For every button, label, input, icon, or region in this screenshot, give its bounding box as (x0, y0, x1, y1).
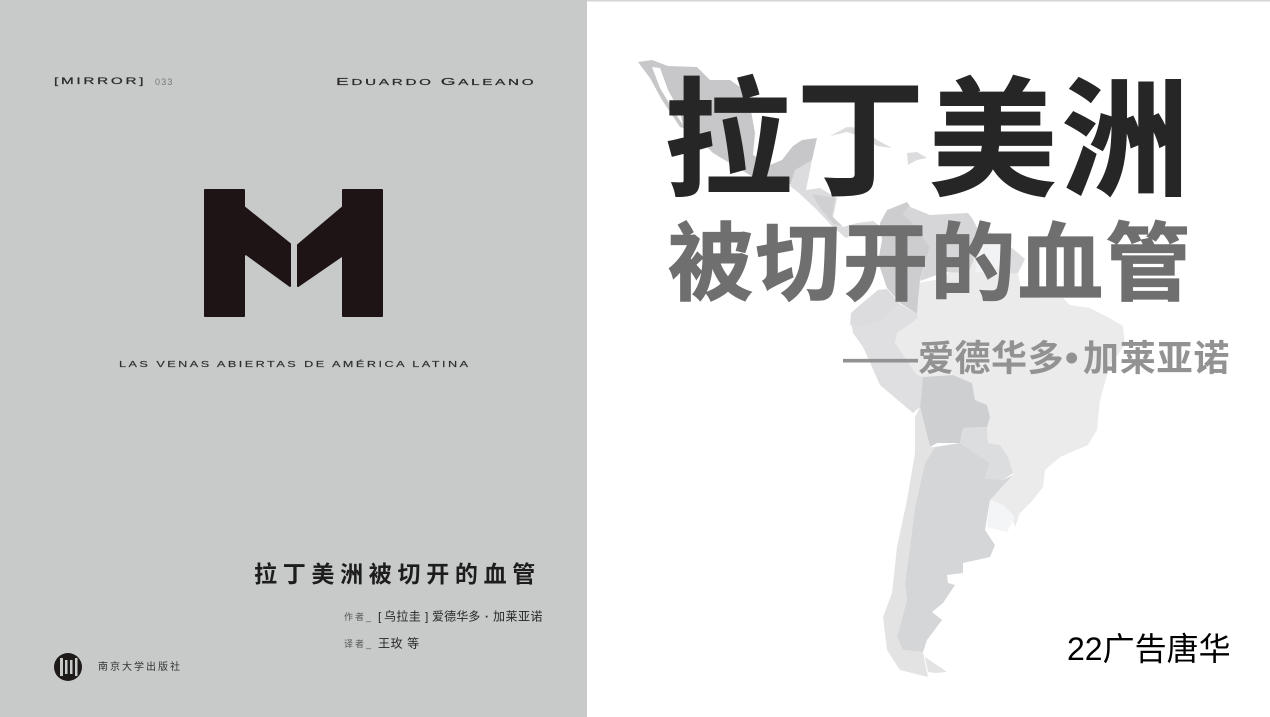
Suriname and French Guiana (1000, 246, 1025, 274)
Guyana (975, 226, 1005, 272)
publisher name: 南京大学出版社 (98, 660, 182, 673)
credit: 22广告唐华 (1067, 631, 1231, 667)
Peru (851, 304, 923, 413)
translator line (344, 636, 420, 650)
author line: 爱德华多 (432, 608, 480, 624)
Argentina (897, 443, 1013, 652)
panel: book cover (0, 0, 587, 717)
author line: ] (425, 610, 428, 624)
map: Latin America (638, 60, 1125, 677)
Paraguay (960, 427, 1013, 480)
author line: 加莱亚诺 (493, 610, 543, 624)
Venezuela (903, 206, 980, 281)
Hispaniola (907, 152, 927, 165)
author line: 作者_ (344, 611, 373, 622)
subtitle: author: 爱德华多 (918, 338, 1064, 378)
series number: 033 (155, 77, 174, 87)
author line: 乌拉圭 (384, 608, 421, 624)
Cuba (830, 127, 892, 148)
Colombia (878, 202, 930, 314)
icon: publisher logo (54, 653, 82, 681)
translator line: 王玫 等 (378, 636, 420, 650)
Bolivia (920, 375, 990, 447)
series label: [MIRROR] (54, 76, 146, 86)
translator line: 译者_ (344, 639, 373, 649)
Chile (883, 407, 935, 677)
title: The Open Veins: 被切开的血管 (668, 218, 1193, 312)
Mexico (638, 60, 817, 186)
original title: LAS VENAS ABIERTAS DE AMÉRICA LATINA (119, 359, 471, 369)
subtitle: author: —— (843, 336, 918, 378)
Ecuador (850, 289, 900, 327)
Central America (790, 160, 880, 238)
book title: 拉丁美洲被切开的血管 (254, 561, 541, 587)
Uruguay (987, 500, 1015, 532)
icon: M logo (205, 190, 382, 316)
Brazil (895, 232, 1125, 527)
author line: · (485, 610, 489, 624)
author name: EDUARDO GALEANO (336, 76, 536, 88)
subtitle: author: 加莱亚诺 (1083, 338, 1230, 378)
author line (344, 608, 543, 624)
subtitle: author (843, 336, 1230, 380)
subtitle: author: • (1065, 338, 1078, 380)
title: Latin America: 拉丁美洲 (664, 70, 1194, 213)
author line: [ (378, 610, 382, 624)
